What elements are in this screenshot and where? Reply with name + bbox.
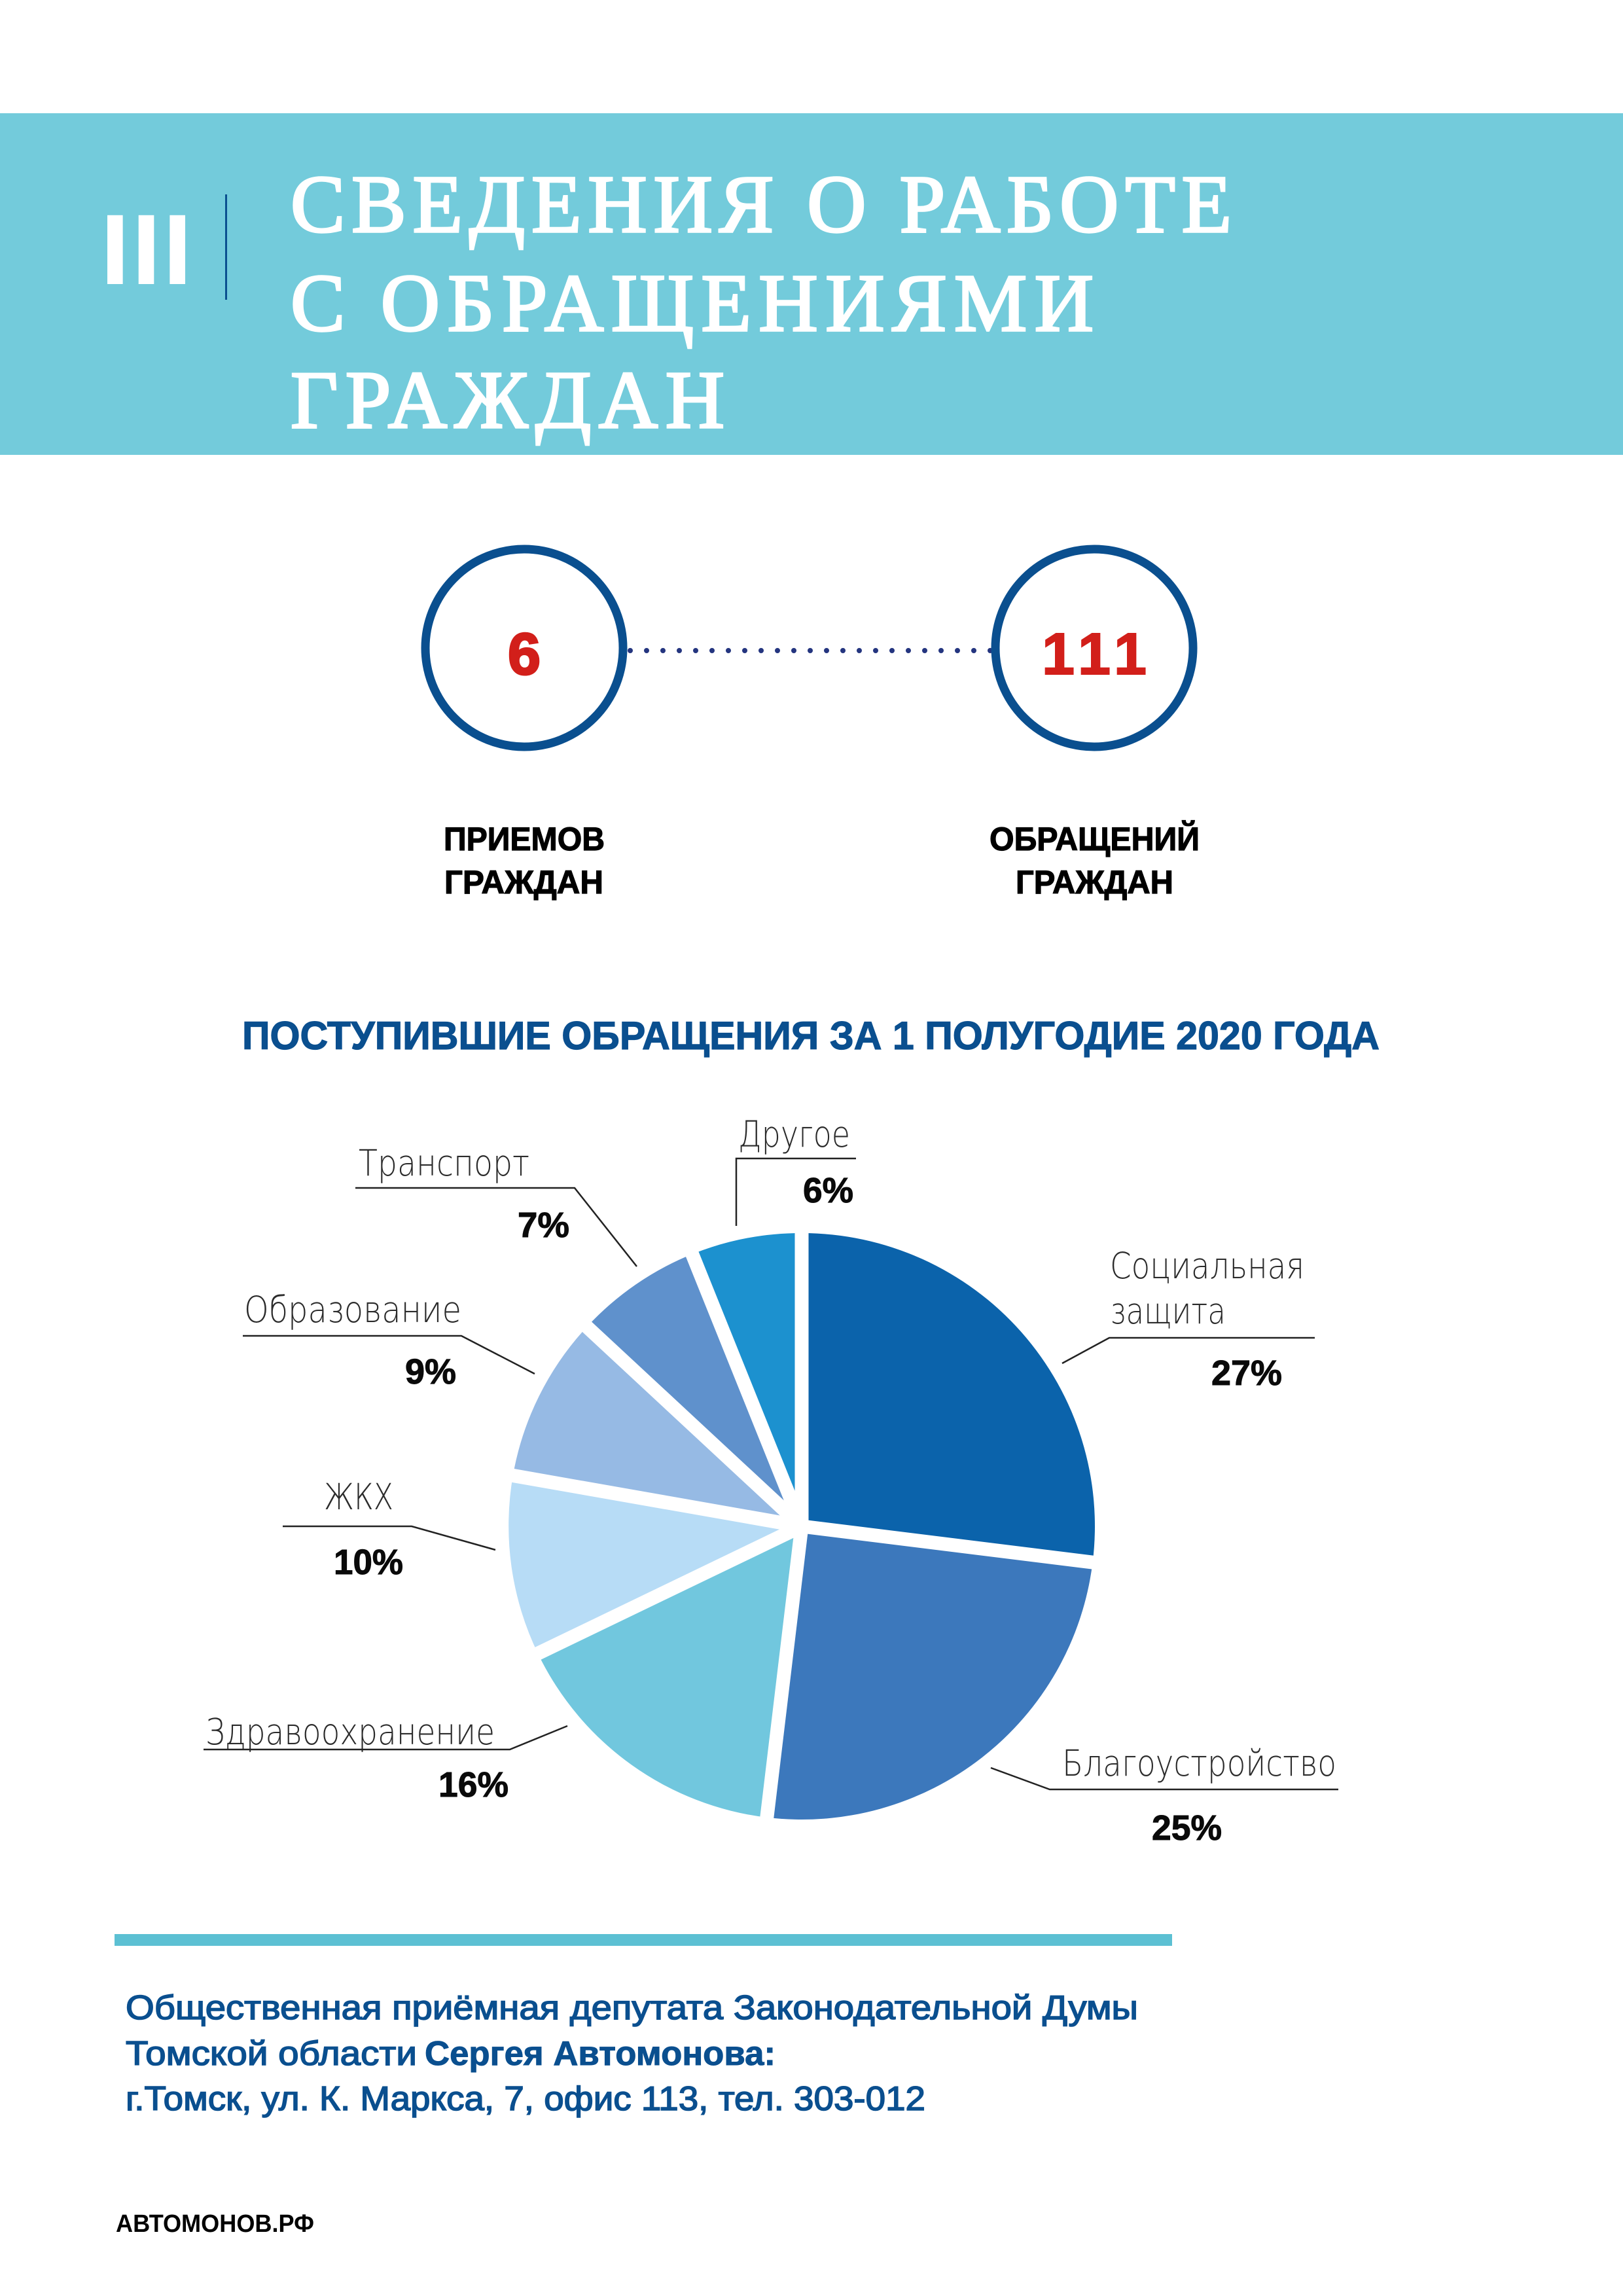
slice: improvement 25% <box>767 1526 1093 1820</box>
callout: other <box>736 1113 856 1226</box>
callout: improvement: 25% <box>1152 1808 1222 1848</box>
callout: transport: 7% <box>518 1206 569 1245</box>
callout: healthcare: 16% <box>438 1765 508 1804</box>
slice: healthcare 16% <box>538 1526 802 1818</box>
title <box>291 160 1232 446</box>
callout: other: 6% <box>803 1171 853 1210</box>
stat: receptions count: 6 <box>508 622 541 687</box>
slice: social protection 27% <box>802 1233 1095 1563</box>
callout: education <box>243 1289 535 1391</box>
callout: healthcare: Здравоохранение <box>205 1711 495 1753</box>
callout: healthcare <box>204 1711 567 1804</box>
section number: III <box>101 194 195 304</box>
dotted connector <box>630 648 991 653</box>
contact block <box>126 1989 1138 2118</box>
accent bar <box>115 1934 1172 1946</box>
header banner <box>0 113 1623 455</box>
header divider <box>225 194 227 300</box>
contact block: Томской области <box>126 2035 417 2073</box>
contact block: Сергея Автомонова: <box>425 2035 776 2073</box>
callout: other: Другое <box>738 1113 850 1155</box>
website: АВТОМОНОВ.РФ <box>116 2210 314 2238</box>
slice: housing 10% <box>508 1475 802 1655</box>
stat: appeals count: 111 <box>1042 622 1147 687</box>
label: appeals: ГРАЖДАН <box>1016 864 1173 901</box>
slice: other 6% <box>692 1233 802 1526</box>
callout: social protection: защита <box>1110 1290 1226 1332</box>
callout: transport: Транспорт <box>359 1142 529 1184</box>
label: receptions: ГРАЖДАН <box>444 864 603 901</box>
contact block: г.Томск, ул. К. Маркса, 7, офис 113, тел. 303-012 <box>126 2080 925 2118</box>
callout: transport <box>355 1142 637 1266</box>
contact block: Общественная приёмная депутата Законодательной Думы <box>126 1989 1138 2027</box>
stat: appeals count <box>995 549 1193 747</box>
title: С ОБРАЩЕНИЯМИ <box>291 259 1094 349</box>
callout: social protection <box>1062 1245 1315 1393</box>
chart heading: ПОСТУПИВШИЕ ОБРАЩЕНИЯ ЗА 1 ПОЛУГОДИЕ 2020 ГОДА <box>242 1014 1380 1058</box>
slice: education 9% <box>513 1327 802 1526</box>
callout: education: 9% <box>405 1352 456 1391</box>
label: appeals: ОБРАЩЕНИЙ <box>990 820 1200 857</box>
slice: transport 7% <box>587 1254 802 1526</box>
title: СВЕДЕНИЯ О РАБОТЕ <box>291 160 1232 250</box>
stat: receptions count <box>425 549 623 747</box>
label: receptions: ПРИЕМОВ <box>444 821 605 857</box>
label: receptions <box>444 821 605 901</box>
callout: housing: ЖКХ <box>324 1476 393 1518</box>
callout: education: Образование <box>244 1289 461 1331</box>
callout: housing <box>283 1476 495 1582</box>
callout: housing: 10% <box>334 1543 403 1582</box>
callout: social protection: 27% <box>1211 1354 1282 1393</box>
callout: social protection: Социальная <box>1110 1245 1304 1287</box>
label: appeals <box>990 820 1200 901</box>
callout: improvement: Благоустройство <box>1062 1742 1336 1784</box>
slice gaps <box>504 1224 1103 1827</box>
title: ГРАЖДАН <box>291 355 724 446</box>
callout: improvement <box>991 1742 1338 1848</box>
pie chart <box>504 1224 1103 1827</box>
